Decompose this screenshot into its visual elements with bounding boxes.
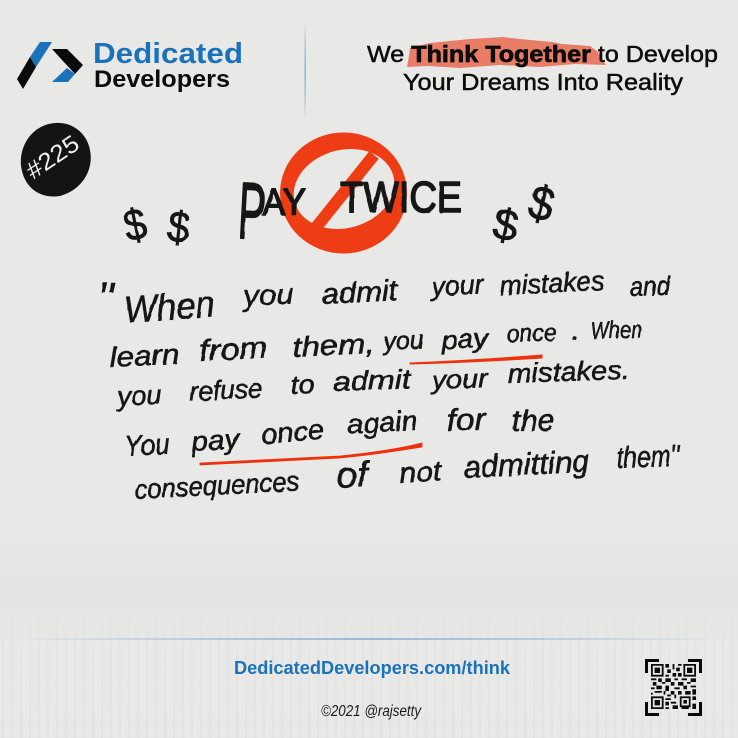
quote line 5: not bbox=[398, 455, 444, 489]
dollar signs bbox=[119, 176, 559, 253]
underline: pay once again bbox=[200, 443, 422, 465]
quote line 4: again bbox=[346, 405, 418, 440]
dollar signs: $ bbox=[523, 176, 559, 233]
quote line 1: and bbox=[629, 271, 671, 302]
quote line 3: you bbox=[115, 380, 162, 412]
quote line 5: them" bbox=[616, 440, 681, 475]
logo wordmark: Developers: Developers bbox=[94, 66, 230, 93]
quote line 4: pay bbox=[189, 424, 242, 457]
quote line 4: once bbox=[260, 415, 325, 450]
tagline line 2: Your Dreams Into Reality bbox=[403, 69, 684, 95]
quote line 2 bbox=[109, 315, 642, 373]
qr modules bbox=[651, 664, 696, 709]
quote line 3: refuse bbox=[189, 373, 263, 407]
quote line 1 bbox=[98, 266, 671, 332]
quote line 2: you bbox=[381, 326, 424, 356]
qr corner brackets bbox=[645, 659, 702, 716]
quote line 1: you bbox=[241, 278, 294, 313]
quote line 5 bbox=[134, 440, 681, 505]
logo mark bbox=[17, 42, 83, 89]
dollar signs: $ bbox=[119, 199, 151, 252]
quote line 5: consequences bbox=[134, 466, 300, 505]
quote line 3 bbox=[115, 355, 630, 412]
quote line 4: You bbox=[124, 429, 170, 463]
quote line 2: from bbox=[199, 331, 268, 368]
prohibition sign bbox=[280, 133, 407, 253]
underline: pay once bbox=[410, 355, 542, 364]
quote line 5: admitting bbox=[463, 443, 590, 485]
quote line 1: When bbox=[123, 284, 216, 332]
quote line 3: admit bbox=[332, 364, 413, 397]
title word: Twice: TWICE bbox=[340, 173, 462, 222]
quote line 4: the bbox=[512, 404, 555, 438]
dollar signs: $ bbox=[489, 199, 523, 252]
quote line 3: to bbox=[290, 369, 315, 400]
quote line 3: your bbox=[429, 363, 490, 395]
title: Pay Twice bbox=[236, 166, 462, 256]
tagline bbox=[367, 37, 718, 95]
quote line 2: once bbox=[506, 319, 557, 348]
title word: Pay: AY bbox=[262, 182, 306, 224]
quote line 4 bbox=[124, 402, 555, 463]
quote line 2: When bbox=[590, 316, 642, 345]
quote line 1: admit bbox=[321, 275, 400, 311]
quote line 1: mistakes bbox=[499, 266, 605, 301]
tagline line 1: We Think Together to Develop bbox=[367, 41, 718, 67]
title word: Pay: P bbox=[236, 166, 268, 256]
brush highlight bbox=[407, 37, 606, 68]
badge: issue number bbox=[21, 123, 91, 196]
quote line 2: learn bbox=[109, 338, 180, 373]
logo bbox=[17, 38, 243, 93]
quote line 4: for bbox=[446, 402, 488, 438]
footer url: DedicatedDevelopers.com/think bbox=[234, 658, 511, 678]
quote line 5: of bbox=[335, 453, 372, 496]
quote bbox=[98, 266, 681, 505]
logo wordmark: Dedicated: Dedicated bbox=[93, 38, 243, 70]
qr code bbox=[645, 659, 702, 716]
quote line 2: them, bbox=[292, 328, 375, 363]
quote line 1: " bbox=[98, 274, 116, 323]
copyright: ©2021 @rajsetty bbox=[321, 703, 422, 720]
dollar signs: $ bbox=[165, 202, 192, 253]
quote line 2: . bbox=[572, 315, 580, 346]
badge: issue number: #225 bbox=[21, 130, 84, 185]
quote line 3: mistakes. bbox=[507, 355, 630, 389]
quote line 1: your bbox=[429, 269, 485, 302]
quote line 2: pay bbox=[440, 323, 490, 355]
